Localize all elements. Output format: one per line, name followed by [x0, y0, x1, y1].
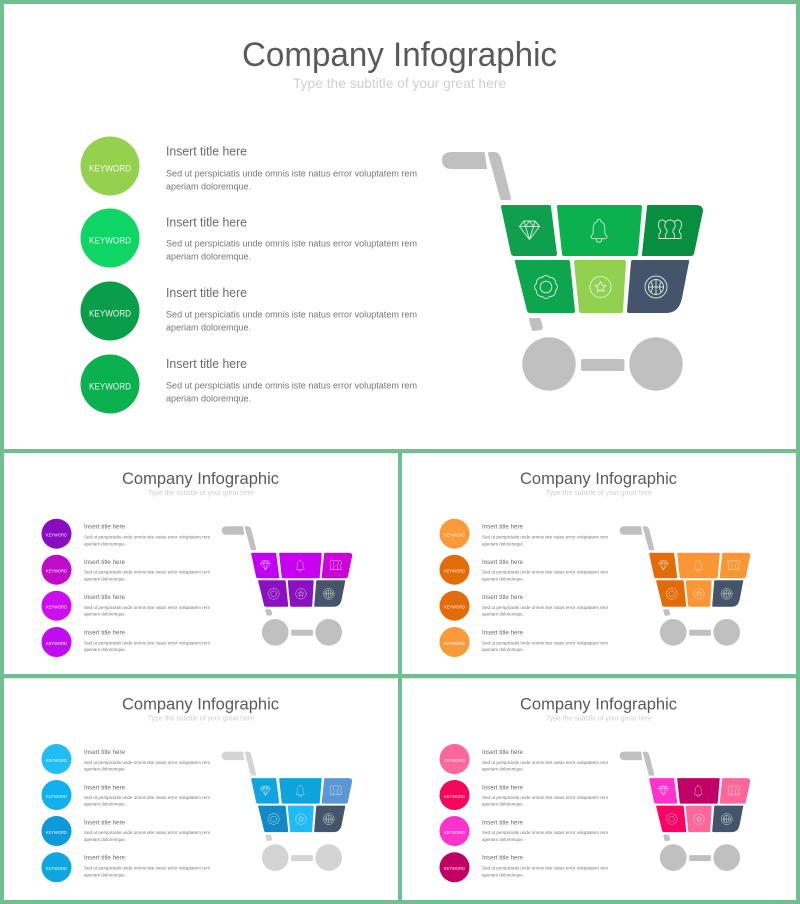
subtitle: Type the subtitle of your great here — [546, 490, 652, 497]
item 4: KEYWORD — [89, 382, 131, 392]
item 3: KEYWORD — [46, 830, 68, 835]
item 3: aperiam doloremque. — [84, 612, 126, 618]
item 1: KEYWORD — [444, 758, 466, 763]
item 1: KEYWORD — [46, 758, 68, 763]
subtitle: Type the subtitle of your great here — [148, 715, 254, 722]
item 4: Sed ut perspiciatis unde omnis iste natus error voluptatem rem — [482, 640, 608, 646]
item 4: Sed ut perspiciatis unde omnis iste natus error voluptatem rem — [84, 866, 210, 872]
item 3: aperiam doloremque. — [166, 322, 251, 334]
item 1: aperiam doloremque. — [482, 767, 524, 773]
item 3: Sed ut perspiciatis unde omnis iste natus error voluptatem rem — [482, 605, 608, 611]
item 4: aperiam doloremque. — [84, 647, 126, 653]
item 3: Sed ut perspiciatis unde omnis iste natus error voluptatem rem — [166, 310, 417, 320]
item 1: Sed ut perspiciatis unde omnis iste natus error voluptatem rem — [84, 535, 210, 541]
item 1 — [42, 519, 210, 549]
item 1: Insert title here — [482, 750, 524, 756]
item 4: Insert title here — [84, 856, 126, 862]
title: Company Infographic — [122, 469, 279, 488]
shopping cart graphic — [222, 752, 352, 871]
item 4 — [80, 354, 417, 414]
item 3 — [42, 591, 210, 621]
item 4: aperiam doloremque. — [482, 647, 524, 653]
item 1 — [440, 744, 608, 774]
item 3: Insert title here — [84, 820, 126, 826]
item 2: Sed ut perspiciatis unde omnis iste natus error voluptatem rem — [482, 795, 608, 801]
item 1: Sed ut perspiciatis unde omnis iste natus error voluptatem rem — [84, 760, 210, 766]
item 3: aperiam doloremque. — [84, 837, 126, 843]
item 4 — [440, 627, 608, 657]
item 1 — [440, 519, 608, 549]
item 2: aperiam doloremque. — [482, 576, 524, 582]
item 2: Insert title here — [84, 560, 126, 566]
panel: orange slide — [402, 453, 796, 674]
item 4: KEYWORD — [444, 641, 466, 646]
item 4 — [42, 627, 210, 657]
item 3: Sed ut perspiciatis unde omnis iste natus error voluptatem rem — [84, 830, 210, 836]
item 1: Sed ut perspiciatis unde omnis iste natus error voluptatem rem — [482, 760, 608, 766]
item 4: aperiam doloremque. — [482, 872, 524, 878]
item 2 — [440, 780, 608, 810]
item 1: Insert title here — [84, 524, 126, 530]
item 3 — [80, 282, 417, 340]
item 1: aperiam doloremque. — [84, 767, 126, 773]
item 2: aperiam doloremque. — [166, 252, 251, 262]
item 3 — [42, 816, 210, 846]
item 4 — [440, 852, 608, 882]
shopping cart graphic — [222, 526, 352, 646]
item 3: KEYWORD — [444, 604, 466, 610]
item 2: Sed ut perspiciatis unde omnis iste natus error voluptatem rem — [166, 238, 417, 250]
item 2: Insert title here — [482, 560, 524, 566]
title: Company Infographic — [520, 694, 677, 713]
item 1: Insert title here — [482, 524, 524, 530]
item 4: Sed ut perspiciatis unde omnis iste natus error voluptatem rem — [166, 380, 417, 392]
item 2: aperiam doloremque. — [84, 802, 126, 808]
item 1: Insert title here — [166, 144, 247, 158]
item 4: KEYWORD — [444, 866, 466, 871]
item 2: Sed ut perspiciatis unde omnis iste natus error voluptatem rem — [482, 570, 608, 576]
item 1: Sed ut perspiciatis unde omnis iste natus error voluptatem rem — [166, 168, 417, 180]
shopping cart graphic — [442, 152, 703, 391]
item 1 — [42, 744, 210, 774]
subtitle: Type the subtitle of your great here — [546, 715, 652, 722]
item 3: KEYWORD — [444, 830, 466, 835]
item 2 — [42, 555, 210, 585]
item 4: KEYWORD — [46, 866, 68, 871]
item 3: aperiam doloremque. — [482, 612, 524, 618]
item 2: aperiam doloremque. — [482, 802, 524, 808]
title: Company Infographic — [520, 469, 677, 488]
item 4: Sed ut perspiciatis unde omnis iste natus error voluptatem rem — [84, 640, 210, 646]
item 3: Insert title here — [166, 286, 247, 300]
item 1: aperiam doloremque. — [482, 541, 524, 547]
item 4: Insert title here — [84, 630, 126, 636]
item 2 — [440, 555, 608, 585]
title: Company Infographic — [122, 694, 279, 713]
item 2: Sed ut perspiciatis unde omnis iste natus error voluptatem rem — [84, 570, 210, 576]
item 3: Insert title here — [482, 595, 524, 601]
item 2: aperiam doloremque. — [84, 576, 126, 582]
item 3: Insert title here — [482, 820, 524, 826]
title: Company Infographic — [242, 36, 557, 74]
item 2: Insert title here — [482, 785, 524, 791]
item 1: aperiam doloremque. — [166, 182, 251, 192]
item 3: aperiam doloremque. — [482, 837, 524, 843]
item 3 — [440, 816, 608, 846]
item 2: KEYWORD — [444, 568, 466, 574]
item 4: aperiam doloremque. — [166, 394, 251, 404]
item 2: Insert title here — [166, 216, 247, 230]
item 4: Insert title here — [482, 630, 524, 636]
item 1: KEYWORD — [46, 532, 68, 538]
item 1: Insert title here — [84, 750, 126, 756]
item 2: Sed ut perspiciatis unde omnis iste natus error voluptatem rem — [84, 795, 210, 801]
panel: pink slide — [402, 678, 796, 900]
item 2: KEYWORD — [89, 236, 131, 246]
item 3: KEYWORD — [89, 308, 131, 318]
item 4 — [42, 852, 210, 882]
item 1: aperiam doloremque. — [84, 541, 126, 547]
item 1 — [80, 136, 417, 196]
item 1: KEYWORD — [444, 532, 466, 538]
item 2: Insert title here — [84, 785, 126, 791]
item 2: KEYWORD — [46, 794, 68, 799]
shopping cart graphic — [620, 526, 750, 646]
subtitle: Type the subtitle of your great here — [293, 75, 506, 91]
item 3: KEYWORD — [46, 604, 68, 610]
item 4: Insert title here — [482, 856, 524, 862]
item 1: Sed ut perspiciatis unde omnis iste natus error voluptatem rem — [482, 535, 608, 541]
item 1: KEYWORD — [89, 164, 131, 174]
item 3: Sed ut perspiciatis unde omnis iste natus error voluptatem rem — [84, 605, 210, 611]
item 3 — [440, 591, 608, 621]
panel: main green slide — [4, 4, 796, 449]
panel: blue slide — [4, 678, 398, 900]
item 4: KEYWORD — [46, 641, 68, 646]
panel: purple slide — [4, 453, 398, 674]
item 4: Insert title here — [166, 357, 247, 371]
item 3: Sed ut perspiciatis unde omnis iste natus error voluptatem rem — [482, 830, 608, 836]
item 2: KEYWORD — [46, 568, 68, 574]
shopping cart graphic — [620, 752, 750, 871]
item 4: aperiam doloremque. — [84, 872, 126, 878]
item 2 — [42, 780, 210, 810]
item 4: Sed ut perspiciatis unde omnis iste natus error voluptatem rem — [482, 866, 608, 872]
subtitle: Type the subtitle of your great here — [148, 490, 254, 497]
item 2: KEYWORD — [444, 794, 466, 799]
item 3: Insert title here — [84, 595, 126, 601]
item 2 — [80, 208, 417, 268]
